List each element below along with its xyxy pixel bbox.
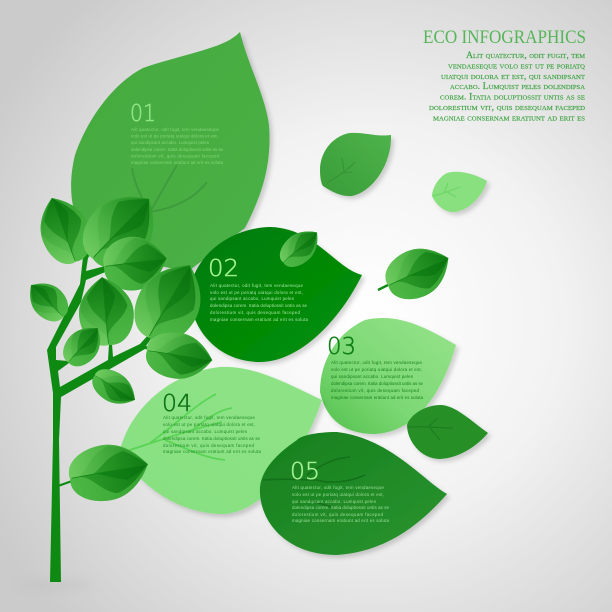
text block 03: magniae consernam eratiunt ad erit es soluta <box>331 395 424 400</box>
text block 01: dolorestium vit, quis desequam faceped <box>131 154 220 158</box>
text block 03: qui sandipsant accabo. Lumquist peles <box>331 374 414 379</box>
text block 02 <box>210 283 309 322</box>
panel: leaf 03 <box>320 318 456 434</box>
text block 01: qui sandipsant accabo. Lumquist peles <box>131 140 210 145</box>
icon: flat light leaf <box>432 172 487 212</box>
leaf: lower right <box>143 328 216 384</box>
text block 02: Alit quatectur, odit fugit, tem vendaeseque <box>210 283 304 288</box>
icon: small leaf on leaf 02 <box>274 222 327 273</box>
leaf: top centre <box>70 178 173 281</box>
description text <box>429 50 586 122</box>
panel: leaf 01 <box>71 32 270 270</box>
leaf: big right <box>122 250 218 353</box>
panel: leaf 05 <box>260 432 447 555</box>
title: ECO INFOGRAPHICS <box>423 28 586 48</box>
number 03: 03 <box>327 334 356 360</box>
text block 02: dolendipsa corem. Itatia doluptiossit untis as se <box>210 303 308 308</box>
text block 04: dolorestium vit, quis desequam faceped <box>163 443 255 448</box>
text block 04: qui sandipsant accabo. Lumquist peles <box>163 429 248 434</box>
icon: floating detailed leaf <box>378 237 458 308</box>
text block 04: dolendipsa corem. Itatia doluptiossit untis as se <box>163 436 261 441</box>
icon: flat dark leaf lower <box>407 405 488 459</box>
description text: uiatqui dolora et est, qui sandipsant <box>441 71 585 81</box>
text block 05 <box>292 485 390 523</box>
number 04: 04 <box>162 391 192 417</box>
text block 03: Alit quatectur, odit fugit, tem vendaeseque <box>331 360 423 365</box>
panel: leaf 02 <box>190 227 362 362</box>
leaf: central <box>76 275 136 348</box>
text block 04 <box>163 415 262 454</box>
icon: flat dark leaf upper <box>320 133 391 196</box>
number 05: 05 <box>290 459 320 485</box>
leaf: top left <box>30 190 99 270</box>
text block 05: qui sandipsant accabo. Lumquist peles <box>292 499 377 504</box>
text block 04: Alit quatectur, odit fugit, tem vendaeseque <box>163 415 256 420</box>
text block 01: Alit quatectur, odit fugit, tem vendaeseque <box>131 127 220 132</box>
text block 02: volo est ut pe poriatq uiatqui dolora et est, <box>210 290 303 295</box>
leaf: small left <box>20 273 75 328</box>
text block 05: dolorestium vit, quis desequam faceped <box>292 512 384 517</box>
text block 05: dolendipsa corem. Itatia doluptiossit untis as se <box>292 505 390 510</box>
description text: dolorestium vit, quis desequam faceped <box>429 102 586 112</box>
description text: vendaeseque volo est ut pe poriatq <box>448 60 586 70</box>
leaf: upper right <box>101 233 170 294</box>
text block 05: Alit quatectur, odit fugit, tem vendaeseque <box>292 485 385 490</box>
text block 01 <box>131 127 224 165</box>
text block 05: magniae consernam eratiunt ad erit es soluta <box>292 518 390 523</box>
description text: accabo. Lumquist peles dolendipsa <box>450 81 586 91</box>
description text: magniae consernam eratiunt ad erit es <box>433 112 585 122</box>
text block 01: magniae consernam eratiunt ad erit es soluta <box>131 160 224 165</box>
panel: leaf 04 <box>120 367 322 514</box>
text block 01: dolendipsa corem. Itatia doluptiossit untis as se <box>131 147 224 152</box>
leaf: small inner <box>56 318 110 373</box>
text block 04: volo est ut pe poriatq uiatqui dolora et est, <box>163 422 255 427</box>
leaf: bottom large <box>65 438 153 507</box>
number 01: 01 <box>130 101 156 127</box>
tree <box>20 178 218 582</box>
text block 05: volo est ut pe poriatq uiatqui dolora et est, <box>292 492 384 497</box>
leaf: small lower <box>87 363 142 413</box>
text block 03 <box>331 360 424 400</box>
ground shadow <box>15 581 95 589</box>
text block 03: dolendipsa corem. Itatia doluptiossit untis as se <box>331 381 424 386</box>
text block 03: volo est ut pe poriatq uiatqui dolora et est, <box>331 367 422 372</box>
description text: Alit quatectur, odit fugit, tem <box>466 50 586 60</box>
text block 02: dolorestium vit, quis desequam faceped <box>210 310 301 315</box>
description text: corem. Itatia doluptiossit untis as se <box>440 92 585 102</box>
text block 02: magniae consernam eratiunt ad erit es soluta <box>210 317 309 322</box>
text block 02: qui sandipsant accabo. Lumquist peles <box>210 296 295 301</box>
text block 04: magniae consernam eratiunt ad erit es soluta <box>163 449 262 454</box>
number 02: 02 <box>208 256 239 282</box>
text block 01: volo est ut pe poriatq uiatqui dolora et est, <box>131 134 218 138</box>
text block 03: dolorestium vit, quis desequam faceped <box>331 388 420 393</box>
trunk and branches <box>47 226 166 582</box>
